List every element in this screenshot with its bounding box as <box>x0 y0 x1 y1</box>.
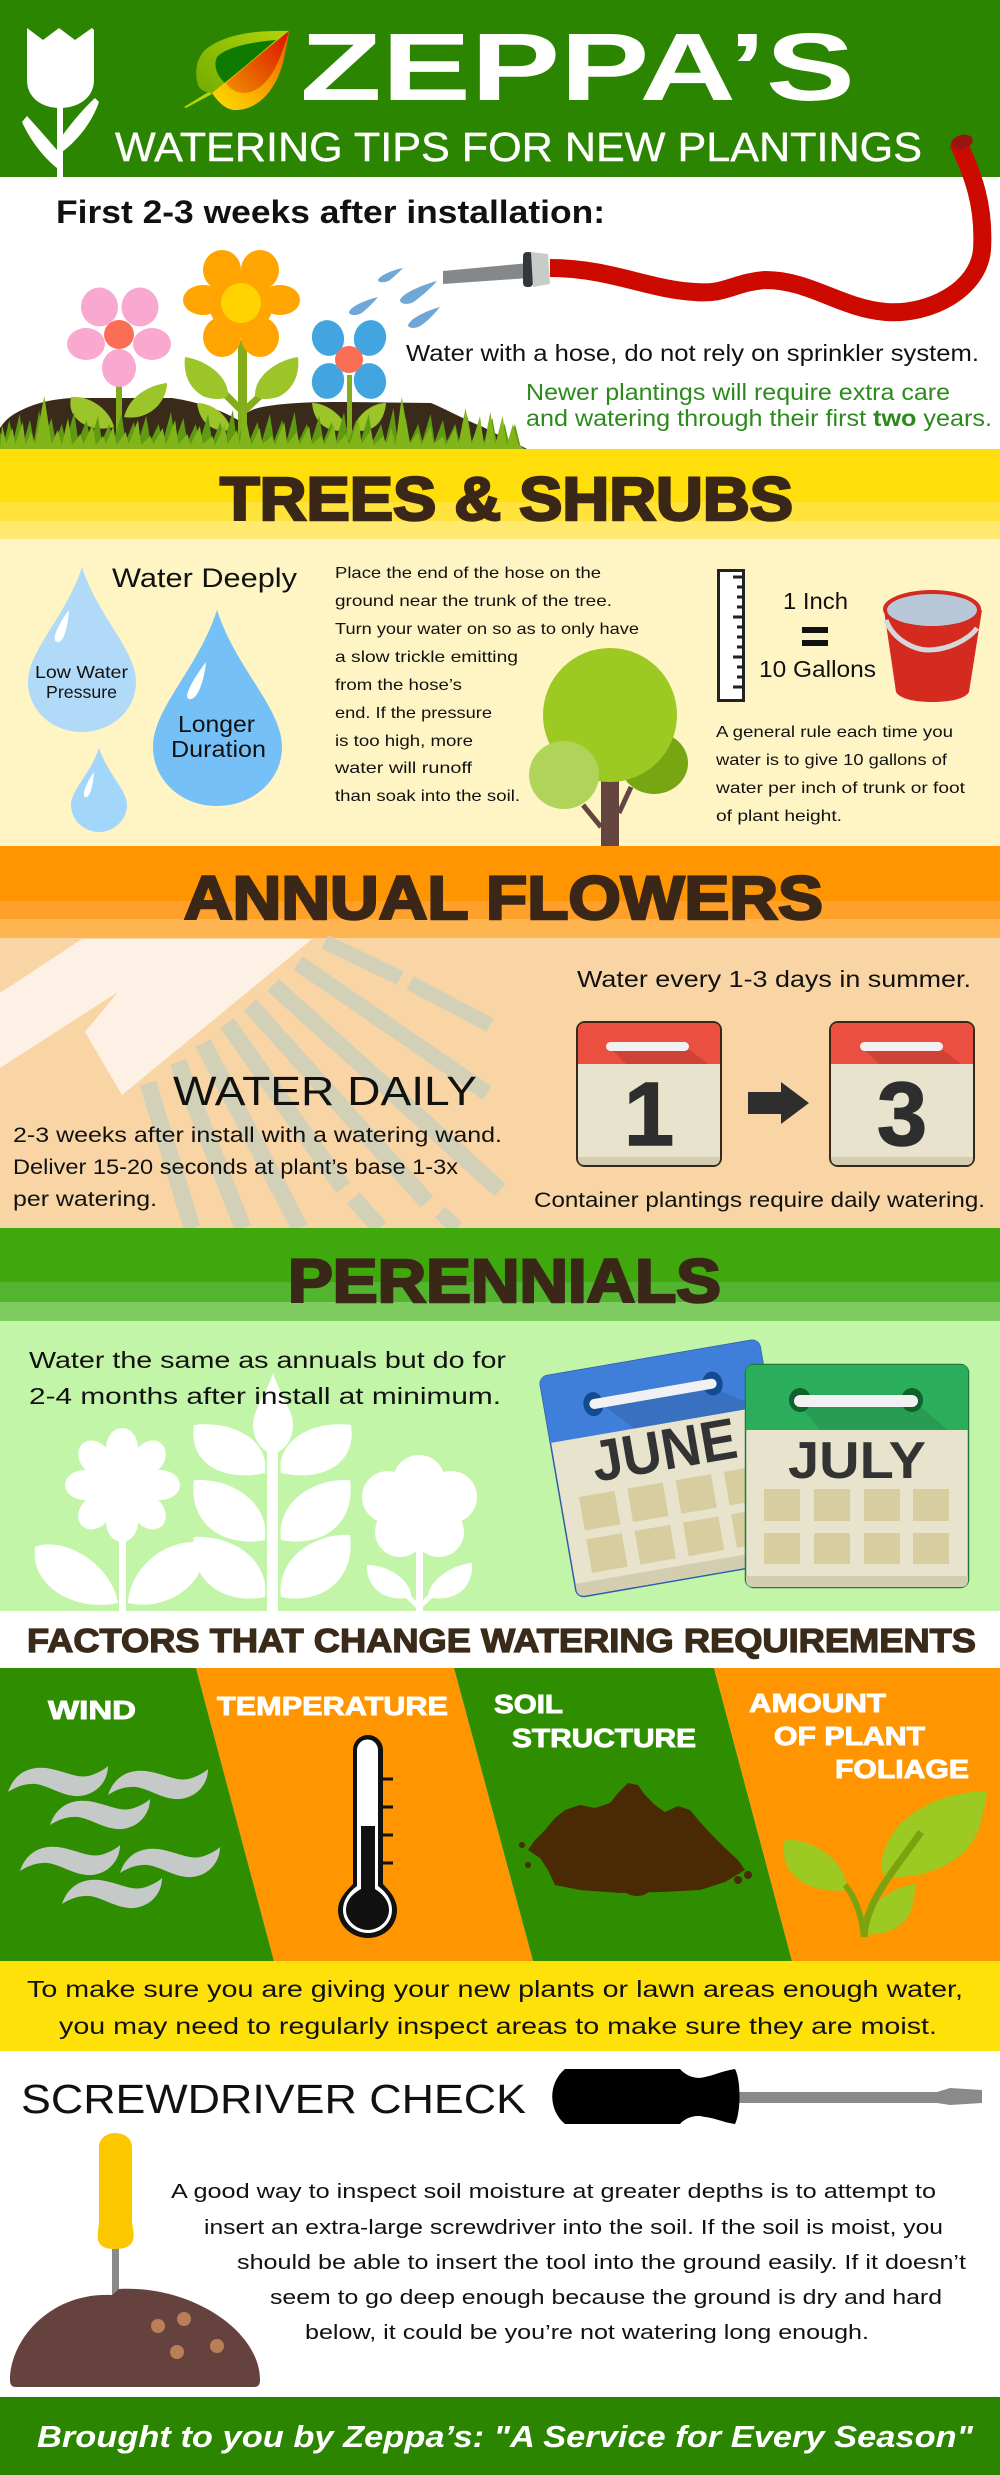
flower: pink <box>67 288 171 445</box>
band: inspect areas: To make sure you are giving your new plants or lawn areas enough water, <box>27 1976 963 2002</box>
panel: trees and shrubs <box>0 449 1000 846</box>
icon: calendar day 1: 1 <box>624 1065 674 1165</box>
panel: factors <box>0 1622 1000 1961</box>
header <box>0 0 1000 177</box>
text: soil moisture: insert an extra-large screwdriver into the soil. If the soil is moist, you <box>204 2216 943 2239</box>
text: wand instructions: per watering. <box>13 1188 157 1211</box>
text: one inch equals ten gallons <box>759 588 876 682</box>
text: same as annuals <box>29 1347 506 1409</box>
icon: drop longer duration: Longer <box>178 711 255 737</box>
footer: Brought to you by Zeppa’s: "A Service for Every Season" <box>37 2419 974 2454</box>
text: hose instructions: from the hose’s <box>335 677 462 694</box>
icon: June calendar <box>539 1339 797 1598</box>
panel: annual flowers <box>0 846 1000 1228</box>
icon: water drops <box>349 268 440 328</box>
factor: plant foliage: FOLIAGE <box>835 1754 969 1784</box>
text: hose instructions: than soak into the soil. <box>335 788 520 805</box>
heading: first weeks: First 2-3 weeks after installation: <box>56 194 605 230</box>
factor: soil structure <box>454 1668 792 1961</box>
text: wand instructions <box>13 1124 502 1211</box>
plant: round flower <box>362 1455 477 1611</box>
text: general rule: of plant height. <box>716 808 842 825</box>
factor: plant foliage: OF PLANT <box>774 1721 925 1751</box>
band: inspect areas <box>0 1961 1000 2051</box>
factor: plant foliage <box>714 1668 1000 1961</box>
factor: plant foliage: AMOUNT <box>749 1688 886 1718</box>
subtitle: WATERING TIPS FOR NEW PLANTINGS <box>115 124 922 170</box>
text: container plantings: Container plantings require daily watering. <box>534 1189 985 1212</box>
text: soil moisture: should be able to insert the tool into the ground easily. If it doesn’t <box>237 2251 966 2274</box>
icon: seedling <box>783 1791 987 1937</box>
text: newer plantings: and watering through their first two years. <box>526 405 992 431</box>
heading: water deeply: Water Deeply <box>112 563 298 593</box>
band: inspect areas: you may need to regularly inspect areas to make sure they are moist. <box>59 2013 937 2039</box>
text: one inch equals ten gallons: 1 Inch <box>783 588 848 614</box>
text: wand instructions: 2-3 weeks after install with a watering wand. <box>13 1124 502 1147</box>
text: hose instructions: Turn your water on so as to only have <box>335 621 639 638</box>
text: hose instructions: is too high, more <box>335 733 473 750</box>
flower: orange <box>183 250 300 445</box>
text: general rule: water is to give 10 gallons of <box>715 752 948 769</box>
plant: daisy <box>35 1428 205 1611</box>
icon: black screwdriver <box>552 2069 982 2124</box>
text: hose instructions: Place the end of the hose on the <box>335 565 601 582</box>
text: hose instructions: a slow trickle emitting <box>335 649 518 666</box>
text: soil moisture <box>171 2180 966 2344</box>
watering wand background <box>0 939 500 1228</box>
icon: thermometer <box>338 1735 397 1938</box>
icon: small drop <box>71 748 127 832</box>
icon: white tulip <box>22 28 99 177</box>
text: soil moisture: A good way to inspect soil moisture at greater depths is to attempt to <box>171 2180 936 2203</box>
panel: first weeks <box>0 132 992 449</box>
icon: drop low water pressure <box>28 567 136 732</box>
text: soil moisture: below, it could be you’re not watering long enough. <box>305 2321 869 2344</box>
icon: ruler <box>718 570 744 700</box>
heading: screwdriver check: SCREWDRIVER CHECK <box>21 2076 526 2122</box>
heading: perennials: PERENNIALS <box>288 1247 721 1315</box>
heading: factors: FACTORS THAT CHANGE WATERING REQUIREMENTS <box>27 1622 976 1659</box>
icon: soil pile <box>519 1783 752 1896</box>
factor: temperature <box>196 1668 533 1961</box>
text: same as annuals: 2-4 months after install at minimum. <box>29 1383 501 1409</box>
icon: wind gusts <box>8 1766 220 1908</box>
heading: annual flowers: ANNUAL FLOWERS <box>184 864 823 932</box>
grass <box>0 396 524 449</box>
text: water with a hose: Water with a hose, do not rely on sprinkler system. <box>406 340 979 366</box>
text: hose instructions: water will runoff <box>334 760 473 777</box>
text: same as annuals: Water the same as annuals but do for <box>29 1347 506 1373</box>
text: newer plantings: Newer plantings will require extra care <box>526 379 950 405</box>
logo: leaf <box>184 31 289 110</box>
icon: garden hose <box>443 132 982 312</box>
icon: drop low water pressure: Low Water <box>35 662 128 682</box>
factor: wind <box>0 1668 274 1961</box>
icon: June calendar: JUNE <box>587 1406 742 1495</box>
text: hose instructions: ground near the trunk of the tree. <box>335 593 612 610</box>
panel: screwdriver check <box>10 2069 982 2387</box>
soil mound <box>0 398 527 449</box>
title: Zeppa's: ZEPPA’S <box>300 14 855 121</box>
plant: leafy stem <box>193 1373 352 1611</box>
icon: July calendar <box>746 1364 968 1588</box>
arrow: day 1 to day 3 <box>748 1082 809 1124</box>
icon: drop low water pressure: Pressure <box>46 682 117 702</box>
text: general rule: water per inch of trunk or foot <box>715 780 966 797</box>
flower: blue <box>308 316 390 440</box>
icon: July calendar: JULY <box>788 1432 926 1490</box>
heading: water daily: WATER DAILY <box>173 1068 477 1114</box>
text: hose instructions <box>334 565 639 805</box>
text: wand instructions: Deliver 15-20 seconds at plant’s base 1-3x <box>13 1156 459 1179</box>
factor: temperature: TEMPERATURE <box>217 1691 448 1721</box>
factor: wind: WIND <box>48 1695 136 1725</box>
icon: tree <box>529 648 688 846</box>
icon: white plants <box>35 1373 477 1611</box>
icon: drop longer duration: Duration <box>171 736 266 762</box>
icon: calendar day 3 <box>830 1022 974 1166</box>
footer <box>0 2397 1000 2475</box>
icon: drop longer duration <box>153 610 282 806</box>
icon: screwdriver in soil <box>10 2133 260 2387</box>
text: newer plantings <box>526 379 992 431</box>
panel: perennials <box>0 1228 1000 1611</box>
text: soil moisture: seem to go deep enough because the ground is dry and hard <box>270 2286 942 2309</box>
factor: soil structure: SOIL <box>494 1689 563 1719</box>
icon: calendar day 3: 3 <box>877 1065 927 1165</box>
factor: soil structure: STRUCTURE <box>512 1723 696 1753</box>
text: general rule <box>715 724 966 825</box>
icon: calendar day 1 <box>577 1022 721 1166</box>
icon: red bucket <box>883 590 982 702</box>
heading: trees and shrubs: TREES & SHRUBS <box>220 465 793 533</box>
text: every 1-3 days: Water every 1-3 days in summer. <box>577 966 971 992</box>
text: hose instructions: end. If the pressure <box>335 705 492 722</box>
text: general rule: A general rule each time you <box>716 724 953 741</box>
text: one inch equals ten gallons: 10 Gallons <box>759 656 876 682</box>
